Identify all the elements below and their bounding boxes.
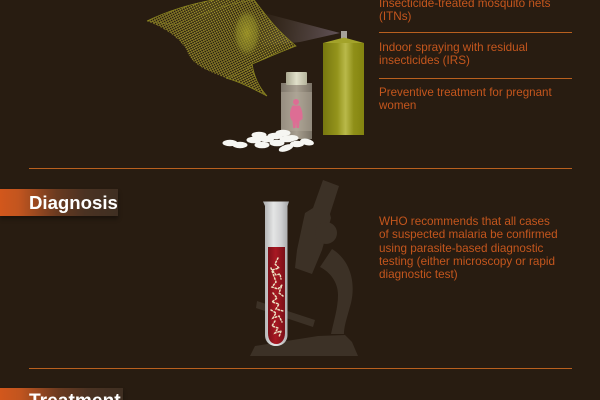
text: indoor spraying: Indoor spraying with residual xyxy=(379,41,528,54)
text: preventive treatment xyxy=(379,86,552,112)
icon: scattered pills xyxy=(222,130,315,153)
icon: spray can xyxy=(323,31,364,135)
text: preventive treatment: women xyxy=(379,99,416,112)
text: indoor spraying xyxy=(379,41,528,67)
text: WHO recommendation: of suspected malaria be confirmed xyxy=(379,228,558,241)
parasites in blood xyxy=(271,258,283,337)
section divider xyxy=(29,368,572,369)
icon: pregnant woman xyxy=(290,99,303,128)
text: WHO recommendation: WHO recommends that all cases xyxy=(379,215,550,228)
icon: pill bottle xyxy=(281,72,312,139)
heading: Diagnosis xyxy=(0,189,118,216)
divider xyxy=(379,32,572,33)
text: indoor spraying: insecticides (IRS) xyxy=(379,54,470,67)
heading: Treatment xyxy=(0,388,123,400)
icon: test tube of blood xyxy=(263,202,289,346)
icon: spray mist xyxy=(256,11,340,46)
text: insecticide-treated nets: (ITNs) xyxy=(379,10,411,23)
icon: microscope silhouette xyxy=(250,180,358,356)
text: WHO recommendation: testing (either microscopy or rapid xyxy=(379,255,555,268)
text: insecticide-treated nets xyxy=(379,0,551,23)
text: WHO recommendation: using parasite-based diagnostic xyxy=(379,242,543,255)
text: WHO recommendation xyxy=(379,215,558,281)
icon: mosquito net xyxy=(147,0,296,96)
text: preventive treatment: Preventive treatment for pregnant xyxy=(379,86,552,99)
section divider xyxy=(29,168,572,169)
text: WHO recommendation: diagnostic test) xyxy=(379,268,458,281)
divider xyxy=(379,78,572,79)
heading: Diagnosis: Diagnosis xyxy=(29,192,118,213)
